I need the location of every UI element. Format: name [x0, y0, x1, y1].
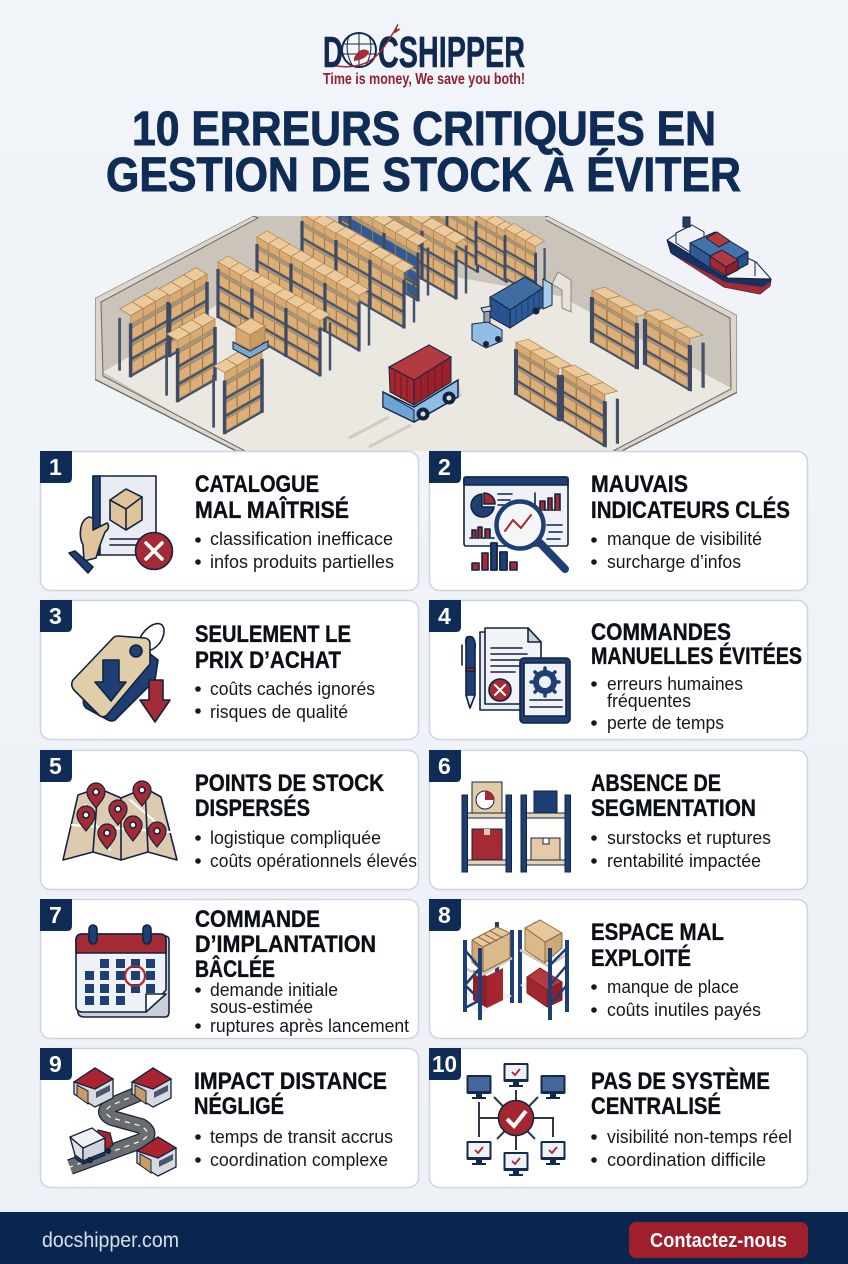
container ship [667, 217, 771, 294]
panel: error 4: perte de temps [607, 712, 724, 733]
badge 8: 8 [438, 902, 451, 928]
panel: error 8: EXPLOITÉ [591, 944, 691, 972]
panel: error 7: ruptures après lancement [210, 1015, 409, 1036]
panel: error 7: BÂCLÉE [195, 955, 275, 983]
panel: error 9 [40, 1048, 418, 1188]
left racks [120, 268, 262, 434]
panel: error 8: ESPACE MAL [591, 919, 724, 946]
panel: error 5 [40, 750, 418, 890]
fork tracks [349, 417, 411, 447]
icon: dashboard and magnifier [464, 477, 568, 570]
pallet robot [233, 318, 268, 358]
panel: error 2: MAUVAIS [591, 471, 688, 498]
panel: error 4: MANUELLES ÉVITÉES [591, 642, 802, 670]
panel: error 1: classification inefficace [210, 528, 393, 549]
panel: error 10: CENTRALISÉ [591, 1092, 721, 1120]
panel: error 9: coordination complexe [210, 1149, 388, 1170]
blue racks [338, 216, 430, 302]
badge 3: 3 [49, 603, 62, 629]
panel: error 1 [40, 451, 418, 590]
panel: error 7: D’IMPLANTATION [195, 931, 376, 958]
panel: error 4 [429, 600, 808, 740]
icon: two shelves with boxes [462, 782, 570, 872]
icon: documents, pen and tablet [462, 628, 570, 723]
badge 4 [429, 600, 461, 632]
panel: error 5: DISPERSÉS [195, 794, 310, 822]
title: 10 ERREURS CRITIQUES EN [132, 103, 716, 156]
logo [323, 24, 525, 88]
footer [0, 1212, 848, 1264]
right racks [516, 285, 703, 449]
panel: error 2: surcharge d’infos [607, 551, 741, 572]
panel: error 1: CATALOGUE [195, 471, 319, 498]
panel: error 6: rentabilité impactée [607, 850, 761, 871]
badge 4: 4 [438, 603, 451, 629]
badge 9 [40, 1048, 72, 1080]
back racks [387, 216, 546, 300]
panel: error 7: sous-estimée [210, 996, 313, 1017]
icon: catalogue with cross [69, 476, 172, 573]
panel: error 2: INDICATEURS CLÉS [591, 496, 790, 524]
badge 8 [429, 899, 461, 931]
icon: warehouses and truck on road [70, 1068, 176, 1176]
panel: error 4: fréquentes [607, 690, 691, 711]
badge 7 [40, 899, 72, 931]
panel: error 10: visibilité non-temps réel [607, 1126, 792, 1147]
badge 7: 7 [49, 902, 62, 928]
icon: centralised network [466, 1063, 566, 1176]
badge 6 [429, 750, 461, 782]
badge 3 [40, 600, 72, 632]
icon: calendar [76, 925, 169, 1017]
panel: error 8: manque de place [607, 976, 739, 997]
panel: error 10: coordination difficile [607, 1149, 766, 1170]
icon: overloaded racks [465, 920, 567, 1020]
panel: error 6: surstocks et ruptures [607, 827, 771, 848]
panel: error 5: logistique compliquée [210, 827, 381, 848]
panel: error 9: IMPACT DISTANCE [194, 1068, 387, 1095]
logo: D [323, 28, 343, 77]
panel: error 9: NÉGLIGÉ [194, 1092, 284, 1120]
panel: error 2 [429, 451, 808, 590]
badge 5: 5 [49, 753, 62, 779]
panel: error 7: COMMANDE [195, 906, 320, 933]
panel: error 1: MAL MAÎTRISÉ [195, 496, 349, 524]
panel: error 3 [40, 600, 418, 740]
panel: error 10 [429, 1048, 808, 1188]
panel: error 7: demande initiale [210, 979, 338, 1000]
badge 5 [40, 750, 72, 782]
panel: error 8 [429, 899, 808, 1038]
badge 1: 1 [49, 454, 62, 480]
contact button [629, 1222, 808, 1258]
badge 1 [40, 451, 72, 483]
panel: error 5: POINTS DE STOCK [195, 770, 384, 797]
panel: error 3: risques de qualité [210, 701, 348, 722]
panel: error 1: infos produits partielles [210, 551, 394, 572]
badge 9: 9 [49, 1051, 62, 1077]
panel: error 4: erreurs humaines [607, 673, 743, 694]
title [106, 103, 741, 202]
logo: Time is money, We save you both! [323, 71, 525, 88]
icon: map with pins [63, 781, 177, 860]
panel: error 10: PAS DE SYSTÈME [591, 1067, 770, 1095]
panel: error 6 [429, 750, 808, 890]
panel: error 4: COMMANDES [591, 619, 731, 646]
logo: CSHIPPER [378, 28, 525, 77]
contact button: Contactez-nous [650, 1230, 787, 1252]
panel: error 3: SEULEMENT LE [195, 621, 351, 648]
panel: error 9: temps de transit accrus [210, 1126, 393, 1147]
badge 2 [429, 451, 461, 483]
panel: error 5: coûts opérationnels élevés [210, 850, 417, 871]
red container AGV [383, 345, 462, 423]
title: GESTION DE STOCK À ÉVITER [106, 148, 741, 202]
panel: error 7 [40, 899, 418, 1038]
badge 6: 6 [438, 753, 451, 779]
badge 10 [429, 1048, 461, 1080]
warehouse illustration [95, 216, 737, 451]
blue container truck [490, 277, 552, 328]
small robot [472, 306, 502, 348]
badge 10: 10 [432, 1051, 457, 1077]
panel: error 6: ABSENCE DE [591, 770, 721, 797]
badge 2: 2 [438, 454, 451, 480]
panel: error 3: coûts cachés ignorés [210, 678, 375, 699]
central racks [218, 208, 414, 376]
panel: error 8: coûts inutiles payés [607, 999, 761, 1020]
panel: error 3: PRIX D’ACHAT [195, 647, 341, 674]
icon: price tags with down arrows [72, 624, 170, 722]
scanner gate [552, 272, 571, 312]
panel: error 6: SEGMENTATION [591, 795, 756, 822]
panel: error 2: manque de visibilité [607, 528, 762, 549]
website: docshipper.com [42, 1229, 179, 1252]
